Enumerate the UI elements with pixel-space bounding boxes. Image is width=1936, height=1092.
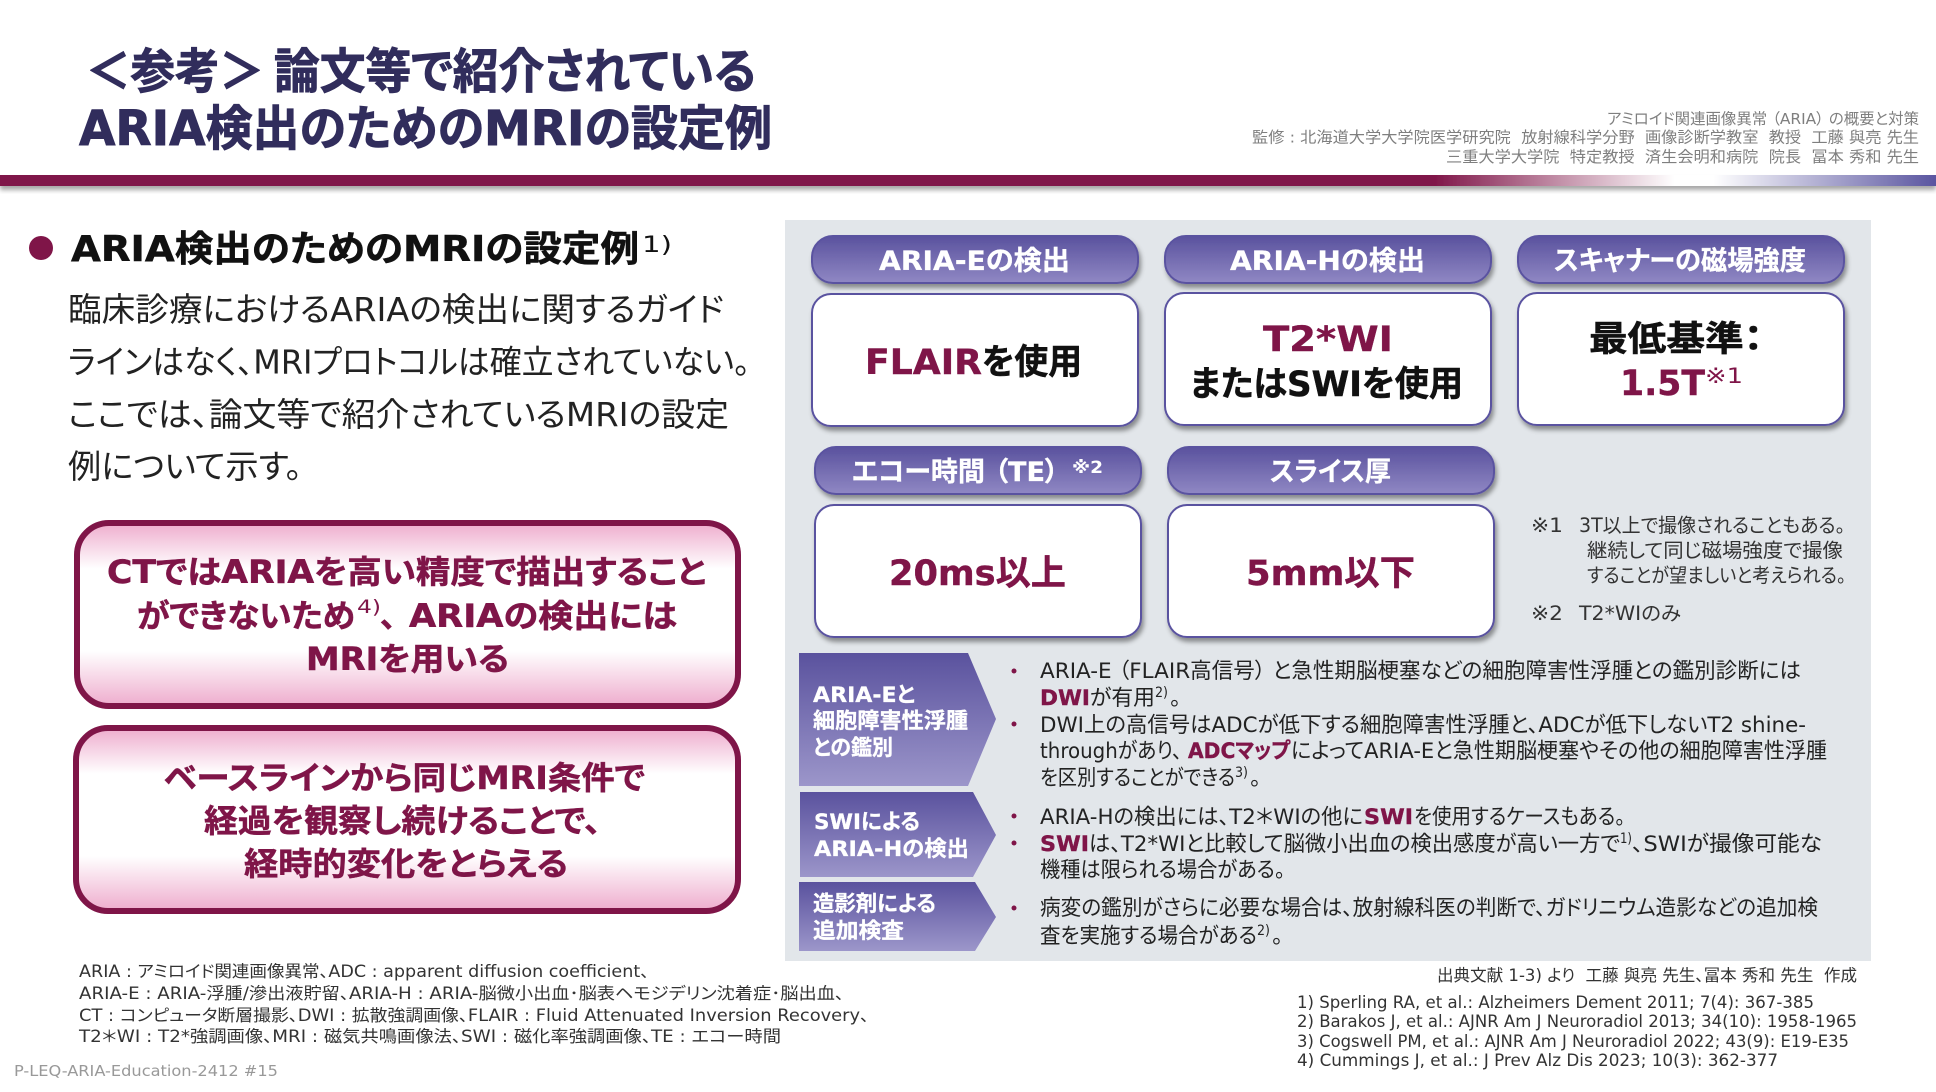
footnotes for cards (1531, 514, 1846, 625)
text: contrast bullet: 病変の鑑別がさらに必要な場合は、放射線科医の判断で、ガドリニウム造影などの追加検 (1040, 896, 1818, 921)
header supervisor credit: アミロイド関連画像異常 （ARIA） の概要と対策 (1607, 110, 1919, 128)
header supervisor credit: 監修 : 北海道大学大学院医学研究院 放射線科学分野 画像診断学教室 教授 工藤 與亮 先生 (1252, 128, 1919, 146)
footnotes for cards: ※2 (1531, 602, 1563, 625)
callout: CT limitation (77, 523, 738, 706)
callout: baseline follow-up: ベースラインから同じMRI条件で (164, 759, 645, 797)
abbreviations: T2＊WI : T2*強調画像、MRI : 磁気共鳴画像法、SWI : 磁化率強調画像、TE : エコー時間 (78, 1027, 781, 1046)
header bar (0, 175, 1936, 186)
callout: CT limitation: ができないため (137, 597, 355, 635)
card: ARIA-E detection: FLAIR (865, 343, 982, 383)
callout: CT limitation: 4) (357, 596, 381, 618)
references (1297, 993, 1857, 1070)
header supervisor credit: 三重大学大学院 特定教授 済生会明和病院 院長 冨本 秀和 先生 (1446, 148, 1919, 166)
heading reference: 1) (642, 233, 672, 258)
card: ARIA-H detection (1165, 236, 1491, 425)
body text: ここでは、論文等で紹介されているMRIの設定 (68, 395, 729, 434)
text: ARIA-E differential bullets: throughがあり、 (1040, 739, 1182, 764)
abbreviations: ARIA : アミロイド関連画像異常、ADC : apparent diffusion coefficient、 (79, 962, 649, 981)
callout: CT limitation: 、 (380, 597, 396, 635)
text: ARIA-E differential bullets: によってARIA-Eと急性期脳梗塞やその他の細胞障害性浮腫 (1291, 739, 1827, 764)
arrow: contrast additional exam: 造影剤による (813, 892, 936, 917)
text: contrast bullet: 2) (1257, 923, 1270, 939)
references: 4) Cummings J, et al.: J Prev Alz Dis 2023; 10(3): 362-377 (1297, 1051, 1778, 1070)
abbreviations: CT : コンピュータ断層撮影、DWI : 拡散強調画像、FLAIR : Fluid Attenuated Inversion Recovery、 (79, 1006, 869, 1025)
body text: 臨床診療におけるARIAの検出に関するガイド (68, 290, 724, 329)
arrow: contrast additional exam (799, 882, 996, 951)
card: ARIA-E detection: ARIA-Eの検出 (879, 246, 1070, 277)
card: field strength: ※1 (1705, 364, 1743, 388)
arrow: SWI ARIA-H detection (800, 792, 996, 877)
text: SWI bullets: SWI (1364, 805, 1413, 830)
footnotes for cards: することが望ましいと考えられる。 (1587, 564, 1846, 587)
card: ARIA-E detection (812, 236, 1138, 426)
footnotes for cards: T2*WIのみ (1578, 602, 1681, 625)
card: slice thickness (1168, 447, 1494, 637)
card: echo time: ※2 (1072, 458, 1103, 478)
text: ARIA-E differential bullets: 2) (1155, 685, 1168, 701)
card: slice thickness: スライス厚 (1270, 457, 1391, 488)
card: ARIA-E detection: を使用 (982, 343, 1082, 383)
bullet (29, 236, 53, 260)
arrow: ARIA-E differential: ARIA-Eと (813, 683, 915, 708)
references: 3) Cogswell PM, et al.: AJNR Am J Neuroradiol 2022; 43(9): E19-E35 (1297, 1032, 1849, 1051)
references: 2) Barakos J, et al.: AJNR Am J Neuroradiol 2013; 34(10): 1958-1965 (1297, 1012, 1857, 1031)
panel: MRI settings background (785, 220, 1871, 961)
footnotes for cards: ※1 (1531, 514, 1563, 537)
card: field strength: スキャナーの磁場強度 (1554, 246, 1806, 277)
footnotes for cards: 継続して同じ磁場強度で撮像 (1587, 539, 1843, 562)
card: field strength (1518, 236, 1844, 425)
card: echo time: エコー時間 （TE） (852, 457, 1068, 488)
header supervisor credit (1252, 110, 1919, 166)
text: ARIA-E differential bullets: DWI (1040, 686, 1090, 711)
text: ARIA-E differential bullets: ARIA-E （FLAIR高信号） と急性期脳梗塞などの細胞障害性浮腫との鑑別診断には (1040, 659, 1801, 684)
body text: ラインはなく、MRIプロトコルは確立されていない。 (68, 342, 750, 382)
text: SWI bullets: を使用するケースもある。 (1414, 805, 1625, 830)
callout: baseline follow-up (76, 728, 738, 911)
callout: baseline follow-up: 経時的変化をとらえる (244, 845, 568, 883)
text: ARIA-E differential bullets: を区別することができる (1040, 766, 1235, 791)
card: field strength: 最低基準： (1589, 320, 1763, 360)
card: echo time (815, 447, 1141, 637)
text: ARIA-E differential bullets (1012, 659, 1827, 791)
card: ARIA-H detection: またはSWIを使用 (1190, 365, 1463, 405)
text: SWI bullets: 、SWIが撮像可能な (1632, 832, 1822, 857)
arrow: SWI ARIA-H detection: SWIによる (814, 810, 920, 835)
arrow: ARIA-E differential (799, 653, 996, 786)
card: field strength: 1.5T (1620, 364, 1705, 404)
card: ARIA-H detection: T2*WI (1263, 320, 1393, 360)
section heading: ARIA検出のためのMRIの設定例 (71, 229, 639, 270)
document code: P-LEQ-ARIA-Education-2412 #15 (14, 1062, 278, 1080)
abbreviations: ARIA-E : ARIA-浮腫/滲出液貯留、ARIA-H : ARIA-脳微小出血･脳表ヘモジデリン沈着症･脳出血、 (79, 983, 844, 1003)
callout: CT limitation: ARIAの検出には (409, 597, 677, 635)
body text (68, 290, 750, 486)
arrow: ARIA-E differential: との鑑別 (813, 736, 893, 761)
text: ARIA-E differential bullets: ADCマップ (1188, 739, 1291, 764)
text: ARIA-E differential bullets: 。 (1170, 686, 1181, 711)
text: ARIA-E differential bullets: DWI上の高信号はADCが低下する細胞障害性浮腫と、ADCが低下しないT2 shine- (1040, 713, 1806, 738)
text: SWI bullets: 1) (1620, 831, 1632, 847)
text: ARIA-E differential bullets: が有用 (1090, 686, 1155, 711)
text: contrast bullet: 。 (1272, 924, 1283, 949)
callout: CT limitation: CTではARIAを高い精度で描出すること (107, 553, 706, 591)
card: echo time: 20ms以上 (889, 554, 1066, 594)
text: SWI bullets: 機種は限られる場合がある。 (1040, 858, 1285, 883)
abbreviations (78, 962, 869, 1046)
arrow: SWI ARIA-H detection: ARIA-Hの検出 (814, 837, 969, 862)
text: ARIA-E differential bullets: 3) (1235, 765, 1248, 781)
title (79, 44, 772, 157)
references: 1) Sperling RA, et al.: Alzheimers Dement 2011; 7(4): 367-385 (1297, 993, 1814, 1012)
arrow: contrast additional exam: 追加検査 (813, 919, 904, 944)
card: ARIA-H detection: ARIA-Hの検出 (1230, 246, 1425, 277)
title: 論文等で紹介されている (274, 44, 756, 100)
footnotes for cards: 3T以上で撮像されることもある。 (1579, 514, 1845, 537)
source credit: 出典文献 1-3) より 工藤 與亮 先生、冨本 秀和 先生 作成 (1437, 966, 1857, 985)
title: ARIA検出のためのMRIの設定例 (79, 101, 772, 157)
callout: CT limitation: MRIを用いる (306, 640, 509, 678)
text: SWI bullets: SWI (1040, 832, 1089, 857)
callout: baseline follow-up: 経過を観察し続けることで、 (204, 802, 601, 840)
text: SWI bullets (1012, 805, 1822, 883)
text: SWI bullets: ARIA-Hの検出には、T2＊WIの他に (1040, 805, 1363, 830)
title: ＜参考＞ (86, 44, 264, 100)
text: contrast bullet (1012, 896, 1818, 949)
card: slice thickness: 5mm以下 (1246, 554, 1415, 594)
arrow: ARIA-E differential: 細胞障害性浮腫 (813, 709, 968, 734)
text: contrast bullet: 査を実施する場合がある (1040, 924, 1257, 949)
text: ARIA-E differential bullets: 。 (1250, 766, 1261, 791)
text: SWI bullets: は、T2*WIと比較して脳微小出血の検出感度が高い一方で (1089, 832, 1620, 857)
body text: 例について示す。 (68, 447, 302, 486)
panel: left summary (29, 229, 750, 486)
